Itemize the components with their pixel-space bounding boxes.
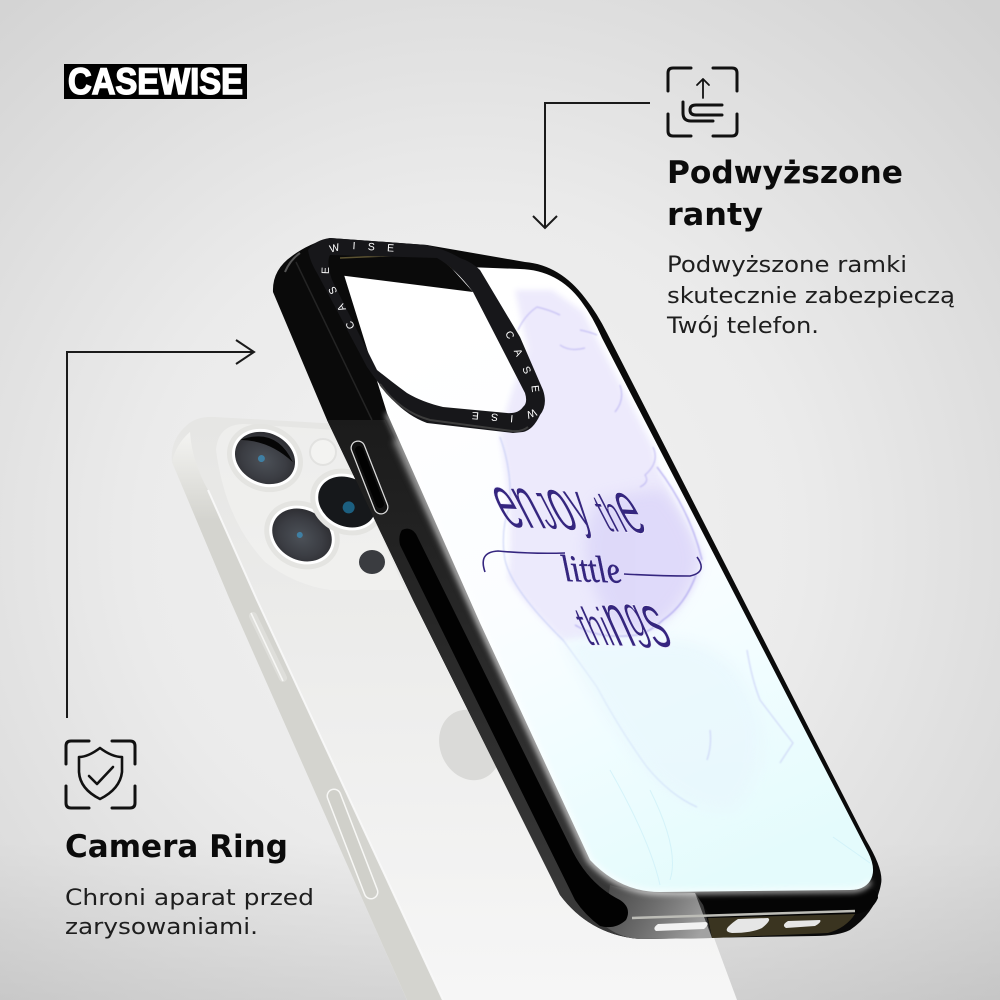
heading: raised edges [667, 155, 903, 233]
screen surface [340, 262, 873, 892]
phone edge highlight [208, 490, 443, 1000]
purple core [585, 490, 698, 631]
text: raised edges: skutecznie zabezpieczą [667, 283, 955, 309]
things: s [625, 578, 683, 664]
side button lower [334, 796, 371, 892]
pale veins lower [707, 650, 793, 763]
corner highlight [285, 253, 300, 272]
lens top [216, 412, 314, 504]
logo: CASEWISE [68, 61, 243, 102]
icon: shield [66, 741, 135, 808]
apple logo [429, 700, 511, 790]
bottom highlight stripe [632, 911, 855, 918]
ring inner wall [330, 252, 473, 292]
black case [273, 238, 881, 939]
volume button [358, 448, 381, 507]
pale purple wash [500, 290, 702, 640]
things: g [610, 583, 657, 650]
bottom translucent corner [605, 885, 712, 939]
heading: camera ring: Camera Ring [65, 829, 288, 865]
purple lower veins [575, 467, 702, 636]
enjoy the: the [584, 465, 663, 550]
case lettering [474, 460, 701, 664]
things: thin [566, 577, 649, 663]
lens bottom [252, 488, 352, 582]
text: camera ring: zarysowaniami. [65, 914, 258, 940]
camera ring [308, 238, 545, 433]
phone side band [172, 432, 443, 1000]
speaker slot right [784, 920, 820, 928]
swash right [624, 557, 701, 576]
case body [273, 238, 881, 939]
bottom olive lip [708, 914, 855, 938]
enjoy the: y [550, 467, 603, 540]
case bottom wall [695, 889, 878, 918]
lens right [298, 456, 396, 548]
text: raised edges: Podwyższone ramki [667, 252, 907, 278]
ring text left: CASEWISE [322, 242, 394, 329]
sensor [359, 550, 385, 574]
upper wall line [296, 262, 372, 420]
charging port [727, 918, 769, 933]
little: little [554, 548, 627, 591]
marble artwork [500, 290, 870, 885]
enjoy the: enJo [474, 460, 595, 547]
lower band tone [327, 420, 712, 939]
icon: raised edges [668, 68, 737, 136]
text: camera ring [65, 885, 314, 940]
white phone [172, 412, 737, 1000]
ring text right: CASEWISE [472, 331, 540, 422]
teal smoke [574, 635, 706, 796]
text: raised edges: Twój telefon. [666, 313, 819, 339]
arrow: left [67, 340, 254, 718]
band inner glow [395, 440, 695, 892]
phone body [172, 417, 737, 1000]
text: camera ring: Chroni aparat przed [65, 885, 314, 911]
purple upper veins [518, 307, 655, 487]
ring face [308, 238, 545, 433]
screen [340, 262, 873, 892]
swash left [483, 551, 565, 572]
flash [310, 439, 336, 465]
camera plateau [216, 424, 405, 590]
arrow: top [533, 103, 650, 228]
text: raised edges [666, 252, 955, 339]
heading: raised edges: Podwyższone [667, 155, 903, 191]
ring lower shine [380, 384, 528, 431]
screen edge glow [387, 413, 870, 892]
side button upper [251, 613, 283, 681]
heading: raised edges: ranty [667, 197, 763, 233]
ring wall shine [340, 254, 452, 268]
band side slot [399, 529, 628, 927]
speaker slot left [654, 922, 708, 931]
